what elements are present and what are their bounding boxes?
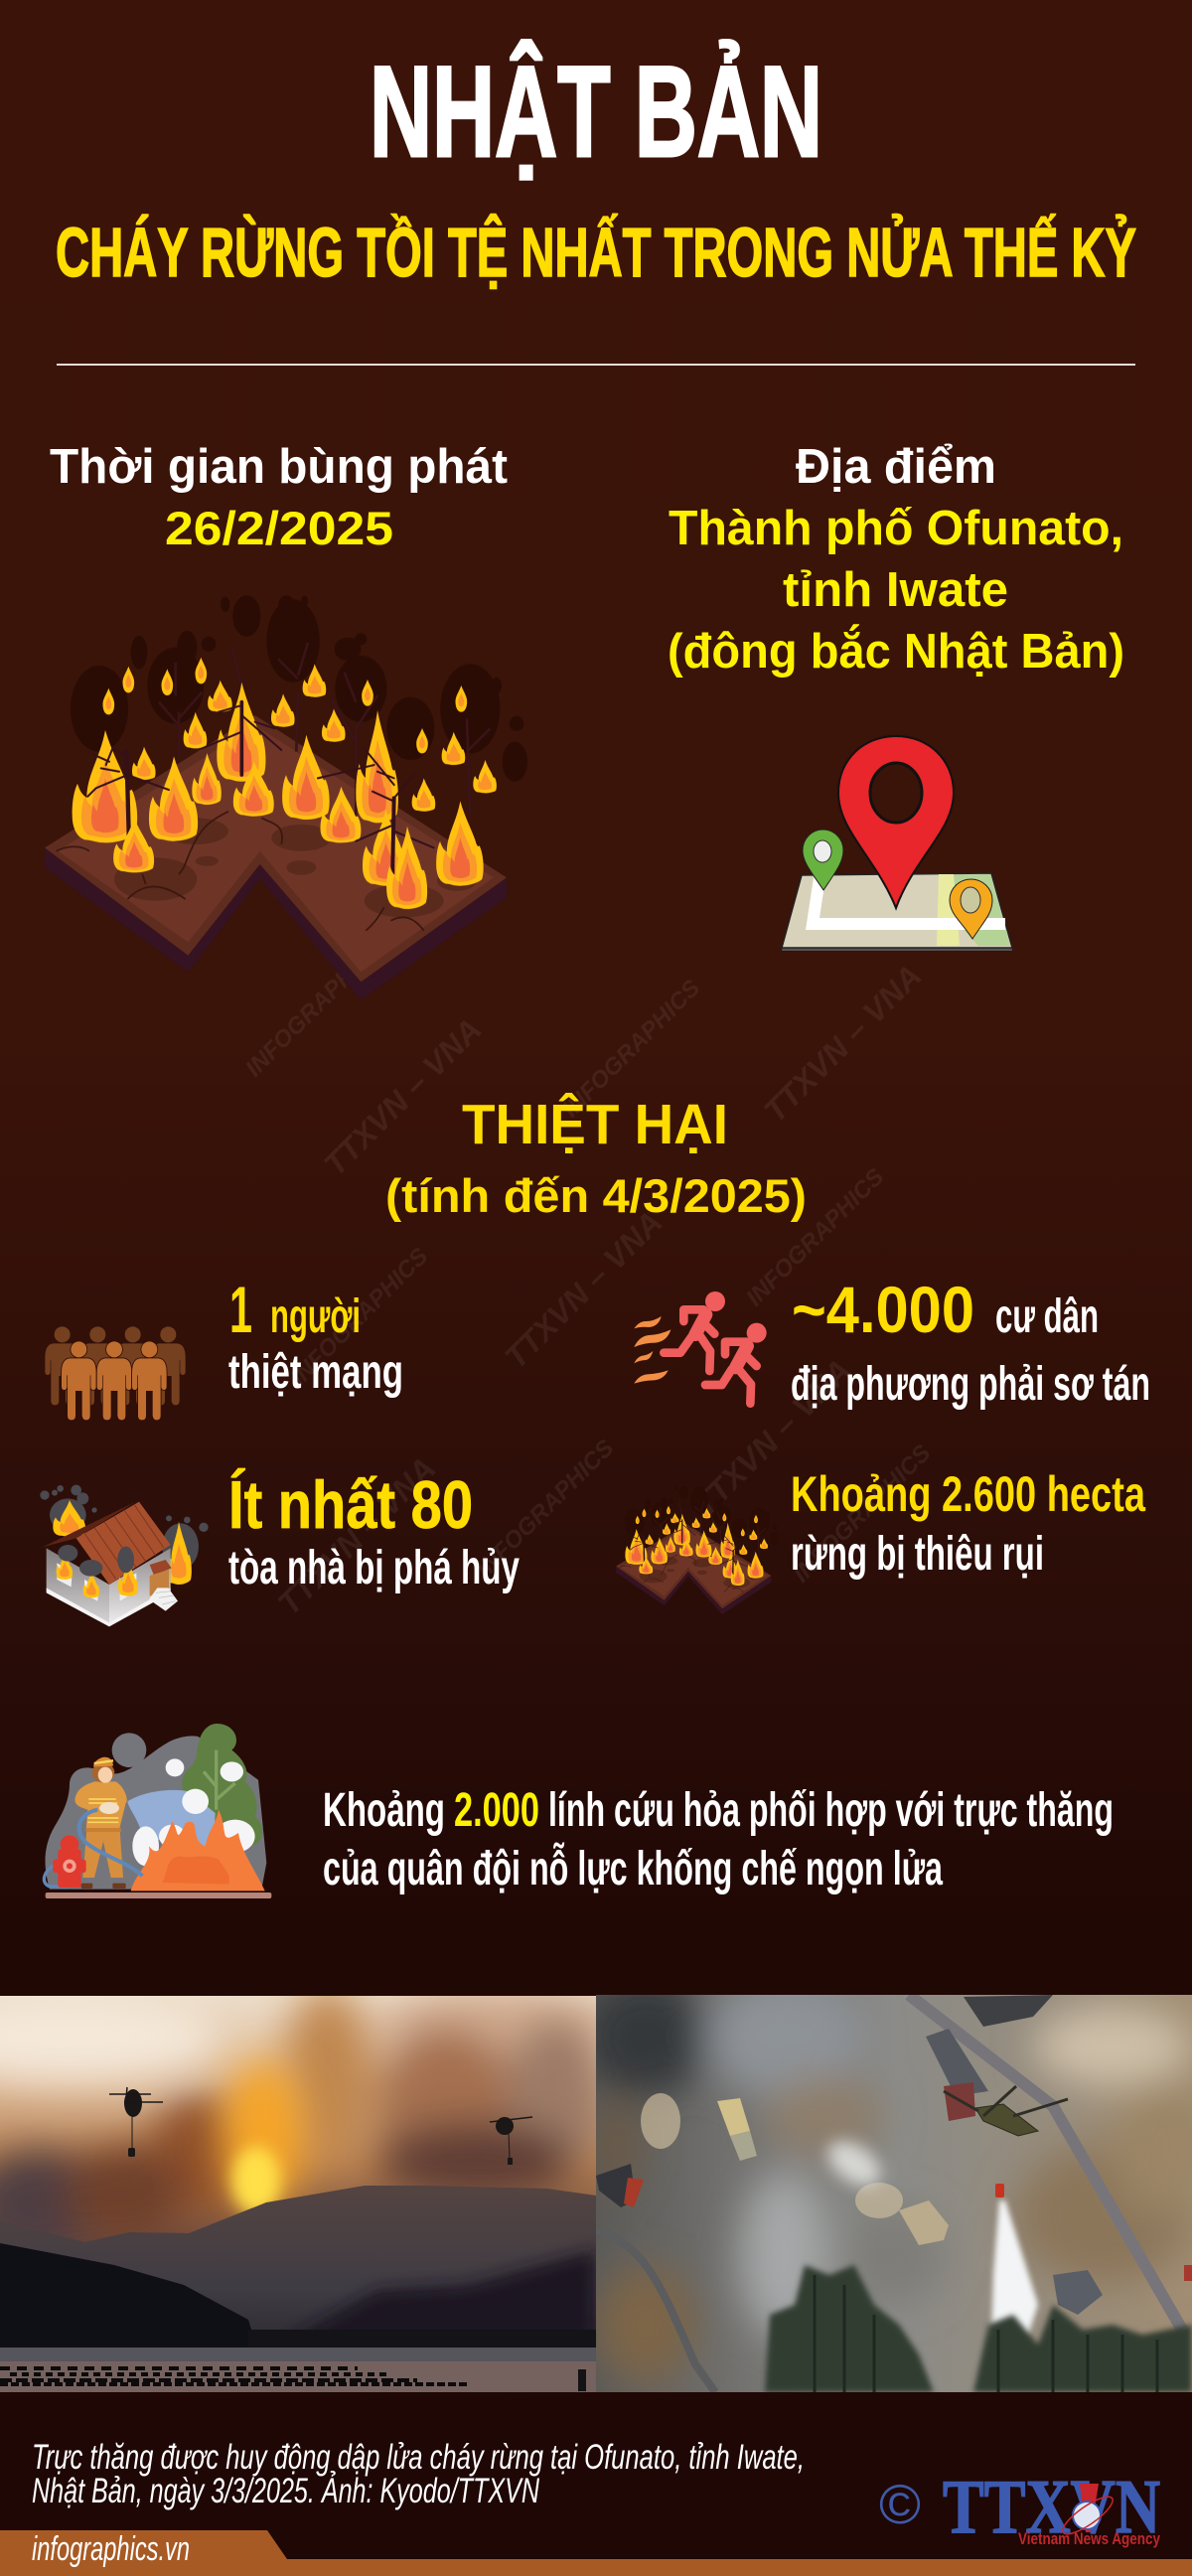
caption: Trực thăng được huy động dập lửa cháy rừng tại Ofunato, tỉnh Iwate, — [32, 2438, 805, 2477]
map base — [782, 873, 1012, 951]
icon: red pin — [838, 736, 954, 908]
number: 1 — [229, 1273, 252, 1346]
watermark pattern — [240, 934, 936, 1621]
copyright mark: © — [879, 2473, 921, 2535]
date of outbreak: 26/2/2025 — [165, 502, 393, 554]
icon: burning house — [40, 1485, 209, 1626]
watermark pattern: INFOGRAPHICS — [741, 1163, 889, 1311]
watermark pattern: INFOGRAPHICS — [557, 975, 705, 1123]
label: location: Địa điểm — [796, 440, 996, 494]
description: thiệt mạng — [228, 1346, 403, 1399]
icon: people — [45, 1326, 186, 1420]
damage date: (tính đến 4/3/2025) — [385, 1169, 807, 1222]
stat: forest area — [616, 1466, 1146, 1614]
number: Ít nhất 80 — [228, 1467, 473, 1543]
text: 2.000 — [454, 1784, 539, 1837]
location text: tỉnh Iwate — [783, 563, 1008, 617]
icon: firefighter — [44, 1724, 271, 1898]
icon: running people — [634, 1291, 767, 1404]
panel: firefighters — [44, 1724, 1114, 1898]
location text: (đông bắc Nhật Bản) — [668, 624, 1124, 679]
stat: buildings — [40, 1467, 520, 1626]
watermark pattern: INFOGRAPHICS — [788, 1440, 936, 1588]
watermark pattern: TTXVN – VNA — [271, 1450, 442, 1621]
icon: map pins — [782, 736, 1012, 951]
watermark pattern: TTXVN – VNA — [757, 958, 928, 1129]
description: tòa nhà bị phá hủy — [228, 1542, 520, 1594]
watermark pattern: INFOGRAPHICS — [471, 1435, 619, 1583]
icon: forest fire illustration — [45, 595, 527, 1000]
location text — [668, 502, 1124, 679]
icon: orange pin — [950, 879, 992, 939]
icon: small forest fire — [616, 1486, 778, 1614]
logo: TTXVN — [879, 2464, 1160, 2549]
stat: evacuees — [634, 1273, 1150, 1411]
description: rừng bị thiêu rụi — [791, 1528, 1044, 1581]
text — [323, 1784, 1114, 1895]
watermark pattern: TTXVN – VNA — [317, 1011, 488, 1182]
heading: damage — [385, 1092, 807, 1222]
watermark pattern: INFOGRAPHICS — [240, 934, 388, 1082]
title: NHẬT BẢN — [370, 39, 822, 184]
label: outbreak time: Thời gian bùng phát — [50, 440, 508, 494]
photo: aerial view of water drop — [581, 1977, 1192, 2392]
panel: outbreak time — [50, 440, 508, 554]
watermark pattern: TTXVN – VNA — [498, 1204, 669, 1375]
icon: green pin — [803, 830, 843, 890]
footer band — [0, 2530, 1192, 2576]
panel: location — [668, 440, 1124, 679]
unit: cư dân — [995, 1290, 1099, 1343]
unit: người — [270, 1290, 361, 1343]
number: ~4.000 — [792, 1273, 974, 1346]
caption: Nhật Bản, ngày 3/3/2025. Ảnh: Kyodo/TTXVN — [32, 2471, 540, 2510]
caption — [32, 2438, 805, 2510]
text: Khoảng — [323, 1784, 445, 1837]
photo: helicopters and sunset smoke — [0, 1987, 616, 2392]
stat: deaths — [45, 1273, 403, 1420]
location text: Thành phố Ofunato, — [669, 502, 1123, 555]
watermark pattern: TTXVN – VNA — [686, 1352, 857, 1523]
website: infographics.vn — [32, 2530, 190, 2568]
damage title: THIỆT HẠI — [462, 1092, 728, 1156]
watermark pattern: INFOGRAPHICS — [285, 1243, 433, 1391]
